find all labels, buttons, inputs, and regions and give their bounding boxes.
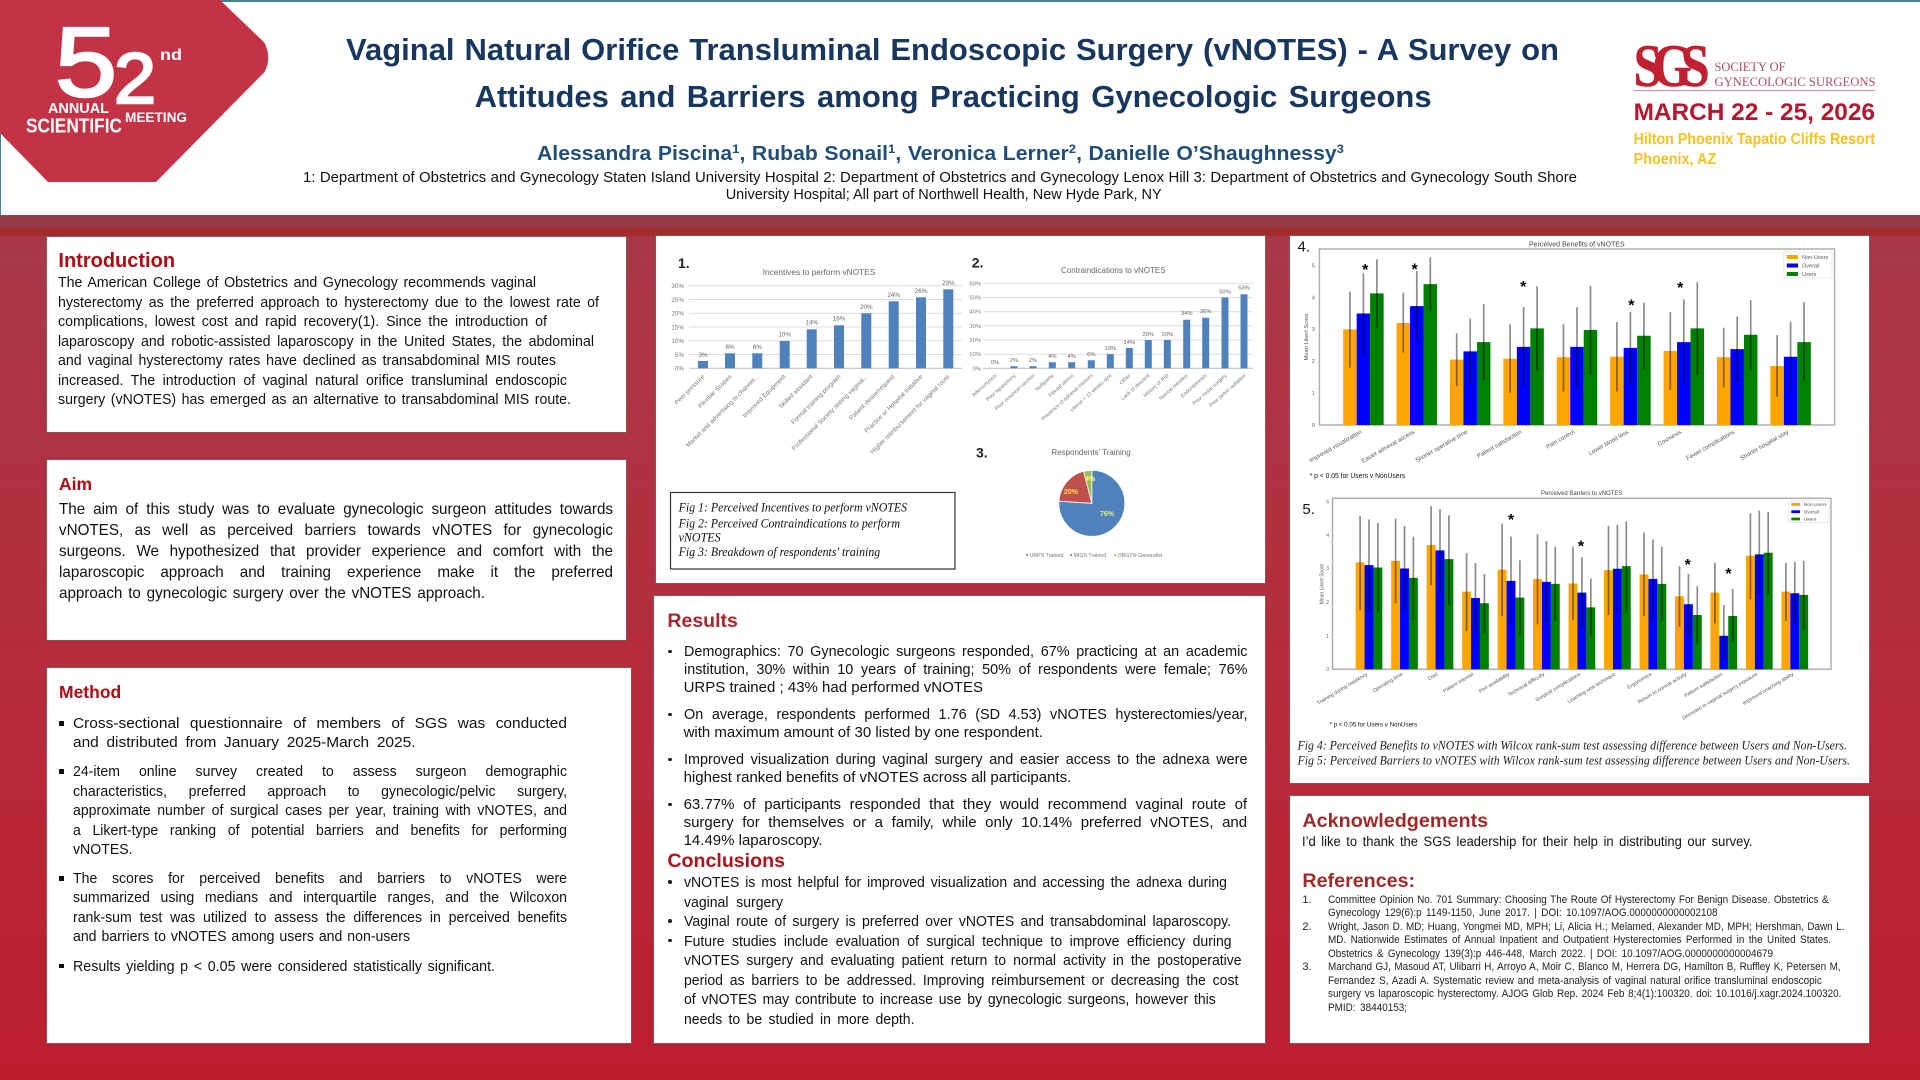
chart: perceived barriers to vNOTES: Decrease in vaginal surgery exposure <box>1681 672 1759 722</box>
chart: perceived barriers to vNOTES: 1 <box>1326 634 1329 640</box>
chart: perceived benefits of vNOTES: Mean Likert Score <box>1304 313 1310 361</box>
bullet: survey: approximate number of surgical cases per year, training with vNOTES, and <box>73 802 567 819</box>
bullet: most helpful <box>684 873 1247 912</box>
bullet: survey: 24-item online survey created to assess surgeon demographic <box>73 763 567 780</box>
bullet: questionnaire: and distributed from January 2025-March 2025. <box>73 734 416 751</box>
chart: contraindications to vNOTES: Nulliparity <box>1034 373 1056 393</box>
text: aim body: vNOTES, as well as perceived barriers towards vNOTES for gynecologic <box>59 522 613 539</box>
chart: contraindications to vNOTES: Fibroid uterus <box>1048 373 1076 399</box>
chart: contraindications to vNOTES: 60% <box>969 281 981 287</box>
text: introduction body: increased. The introduction of vaginal natural orifice transluminal endoscopic <box>58 372 567 388</box>
logo: 52nd annual scientific meeting: ANNUAL <box>48 100 109 117</box>
bullet: survey: characteristics, preferred approach to gynecologic/pelvic surgery, <box>73 783 567 800</box>
chart: incentives to perform vNOTES: 3% <box>698 352 708 359</box>
chart: contraindications to vNOTES: 2% <box>1010 358 1018 364</box>
chart: perceived barriers to vNOTES: Learning new technique <box>1567 672 1617 705</box>
chart: perceived barriers to vNOTES: 0 <box>1326 667 1329 673</box>
chart: contraindications to vNOTES: 40% <box>969 310 981 316</box>
society logo and meeting details: SGS <box>1634 33 1710 100</box>
caption box: figures 1 to 3 <box>670 492 955 569</box>
text: aim body: The aim of this study was to evaluate gynecologic surgeon attitudes towards <box>59 501 613 518</box>
chart: incentives to perform vNOTES: 24% <box>887 292 900 299</box>
caption box: figures 1 to 3: Fig 2: Perceived Contraindications to perform <box>678 517 900 531</box>
chart: contraindications to vNOTES: 0% <box>973 366 981 372</box>
chart: perceived benefits of vNOTES: Easier adnexal access <box>1361 430 1416 465</box>
society logo and meeting details: Hilton Phoenix Tapatio Cliffs Resort <box>1634 131 1875 148</box>
chart: perceived benefits of vNOTES: Shorter hospital stay <box>1740 430 1790 462</box>
text: introduction body: and vaginal hysterectomy rates have declined as transabdominal MIS routes <box>58 352 556 369</box>
chart: incentives to perform vNOTES: 0% <box>675 366 684 372</box>
chart: incentives to perform vNOTES: 29% <box>942 280 955 287</box>
chart: perceived barriers to vNOTES: * p < 0.05 for Users v NonUsers <box>1330 722 1417 729</box>
chart: perceived barriers to vNOTES: 5 <box>1326 500 1329 506</box>
chart: perceived benefits of vNOTES: Non-Users <box>1802 255 1829 261</box>
bullet: highest ranked benefits <box>684 751 1247 787</box>
reference 2 <box>1302 920 1844 960</box>
chart: perceived barriers to vNOTES: * <box>1725 566 1732 583</box>
chart: incentives to perform vNOTES: 15% <box>671 324 684 331</box>
chart: perceived benefits of vNOTES: * <box>1362 262 1369 279</box>
chart: incentives to perform vNOTES: 20% <box>860 304 873 311</box>
header <box>0 0 1920 215</box>
chart: perceived barriers to vNOTES: 5. <box>1302 501 1315 518</box>
chart: perceived benefits of vNOTES: Patient satisfaction <box>1476 430 1523 460</box>
chart: incentives to perform vNOTES: Incentives to perform vNOTES <box>763 267 876 277</box>
chart: incentives to perform vNOTES: 20% <box>671 310 684 318</box>
reference 1: Gynecology 129(6):p 1149-1150, June 2017. | DOI: 10.1097/AOG.0000000000002108 <box>1328 907 1717 919</box>
bullet: average cases <box>684 706 1247 742</box>
text: introduction body: The American College of Obstetrics and Gynecology recommends vaginal <box>58 274 536 291</box>
chart: perceived barriers to vNOTES: Operating time <box>1372 672 1404 694</box>
chart: contraindications to vNOTES: 2. <box>972 255 983 271</box>
chart: perceived barriers to vNOTES: * <box>1508 512 1515 529</box>
bullet: route preference: surgery for themselves or a family, while only 10.14% preferred vNOTES, and <box>684 814 1247 831</box>
chart: contraindications to vNOTES: 20% <box>1142 332 1154 338</box>
chart: incentives to perform vNOTES: 14% <box>805 320 818 326</box>
text: introduction body: hysterectomy as the preferred approach to hysterectomy due to the lowest rate of <box>58 294 599 310</box>
chart: respondents' training pie: Respondents' Training <box>1051 448 1131 457</box>
list: results bullets <box>668 643 1248 849</box>
chart: perceived benefits of vNOTES <box>1298 239 1835 480</box>
panel: results and conclusions <box>654 596 1265 1043</box>
panel: acknowledgements and references: 2. <box>1302 920 1312 932</box>
bullet: demographics: Demographics: 70 Gynecologic surgeons responded, 67% practicing at an academic <box>684 643 1247 660</box>
bullet: survey: a Likert-type ranking of potential barriers and benefits for performing <box>73 822 567 839</box>
bullet: most helpful: vNOTES is most helpful for improved visualization and accessing the adnexa during <box>684 874 1227 891</box>
chart: perceived benefits of vNOTES: Shorter operative time <box>1415 429 1470 464</box>
heading: results: Results <box>667 610 738 632</box>
affiliations: 1: Department of Obstetrics and Gynecology Staten Island University Hospital 2: Department of Obstetrics and Gynecology Lenox Hill 3: Department of Obstetrics and Gynecology South Shore <box>303 170 1577 186</box>
chart: incentives to perform vNOTES: Peer pressure <box>673 373 707 406</box>
chart: contraindications to vNOTES: 30% <box>969 324 981 330</box>
chart: contraindications to vNOTES: Prior laparotomy <box>985 373 1018 403</box>
text: introduction body: laparoscopy and robotic-assisted laparoscopy in the United States, the abdominal <box>58 332 594 350</box>
caption: figures 4 and 5: Fig 4: Perceived Benefits to vNOTES with Wilcox rank-sum test assessing difference between Users and Non-Users. <box>1297 738 1847 752</box>
text: introduction body: surgery (vNOTES) has emerged as an alternative to transabdominal MIS route. <box>58 391 571 408</box>
bullet: scores: summarized using medians and interquartile ranges, and the Wilcoxon <box>73 889 567 906</box>
caption box: figures 1 to 3: Fig 3: Breakdown of respondents' training <box>678 545 880 559</box>
chart: contraindications to vNOTES: 50% <box>969 296 981 302</box>
bullet: most helpful: vaginal surgery <box>684 894 783 910</box>
chart: perceived benefits of vNOTES: 0 <box>1312 423 1315 429</box>
bullet: future studies: Future studies include evaluation of surgical technique to improve efficiency during <box>684 932 1231 950</box>
chart: perceived benefits of vNOTES: 3 <box>1312 327 1315 333</box>
chart: perceived benefits of vNOTES: Improved visualization <box>1309 430 1363 464</box>
chart: perceived barriers to vNOTES: Training during residency <box>1316 671 1369 707</box>
chart: perceived barriers to vNOTES: Surgical complications <box>1535 671 1582 703</box>
panel: method <box>47 668 630 1043</box>
society logo and meeting details: Phoenix, AZ <box>1634 151 1717 168</box>
chart: incentives to perform vNOTES: 26% <box>915 288 928 295</box>
chart: incentives to perform vNOTES: Market and advertising to channel... <box>685 373 761 449</box>
text: aim body <box>59 501 613 602</box>
charts 1 to 3 and caption <box>670 255 1253 570</box>
chart: perceived benefits of vNOTES: 4. <box>1298 239 1310 256</box>
bullet: route preference: 63.77% of participants responded that they would recommend vaginal route of <box>684 796 1247 813</box>
chart: perceived benefits of vNOTES: Pain control <box>1546 430 1576 451</box>
panel: figures 4 and 5 <box>1290 236 1868 783</box>
caption: figures 4 and 5 <box>1297 738 1850 767</box>
bullet: route preference: 14.49% laparoscopy. <box>684 832 823 849</box>
chart: incentives to perform vNOTES: 10% <box>671 338 684 345</box>
chart: respondents' training pie: OBGYN Generalist <box>1118 553 1163 559</box>
bullet: future studies: needs to be studied in more depth. <box>684 1010 914 1028</box>
bullet: demographics <box>684 643 1247 697</box>
chart: contraindications to vNOTES: 20% <box>969 338 981 344</box>
logo: 52nd annual scientific meeting <box>0 0 268 182</box>
chart: perceived benefits of vNOTES: * <box>1677 280 1684 297</box>
bullet: survey <box>73 762 567 859</box>
bullet: scores <box>73 869 567 947</box>
logo: 52nd annual scientific meeting: SCIENTIFIC <box>26 116 122 138</box>
caption box: figures 1 to 3: Fig 1: Perceived Incentives to perform vNOTES <box>678 501 908 515</box>
chart: perceived barriers to vNOTES: Perceived Barriers to vNOTES <box>1541 491 1622 497</box>
heading: method: Method <box>59 682 121 702</box>
bullet: highest ranked benefits: Improved visualization during vaginal surgery and easier access to the adnexa were <box>684 751 1247 768</box>
reference 2: Wright, Jason D. MD; Huang, Yongmei MD, MPH; Li, Alicia H.; Melamed, Alexander MD, MPH; Hershman, Dawn L. <box>1328 920 1844 932</box>
chart: contraindications to vNOTES: 2% <box>1029 358 1037 364</box>
chart: perceived barriers to vNOTES: Ergonomics <box>1626 671 1653 691</box>
chart: contraindications to vNOTES: 6% <box>1087 352 1095 358</box>
chart: contraindications to vNOTES: 50% <box>1219 290 1231 296</box>
chart: perceived benefits of vNOTES: Lower blood loss <box>1588 430 1630 457</box>
chart: perceived benefits of vNOTES: * <box>1411 262 1418 278</box>
reference 3: Marchand GJ, Masoud AT, Ulibarri H, Arroyo A, Moir C, Blanco M, Herrera DG, Hamilton B, Ruffley K, Petersen M, <box>1328 961 1840 973</box>
chart: perceived barriers to vNOTES: Overall <box>1804 509 1819 515</box>
chart: perceived barriers to vNOTES: Users <box>1804 517 1817 523</box>
chart: contraindications to vNOTES: 4% <box>1048 354 1056 360</box>
chart: respondents' training pie: MIGS Trained <box>1074 553 1106 559</box>
chart: incentives to perform vNOTES: 30% <box>671 283 684 290</box>
chart: perceived benefits of vNOTES: 4 <box>1312 295 1316 301</box>
charts 4 and 5 and captions <box>1297 239 1850 767</box>
panel: acknowledgements and references: 3. <box>1302 961 1312 973</box>
chart: respondents' training pie: 20% <box>1064 489 1079 496</box>
reference 3: Fernandez S, Azadi A. Systematic review and meta-analysis of vaginal natural orifice transluminal endoscopic <box>1328 974 1821 986</box>
chart: contraindications to vNOTES: Contraindications to vNOTES <box>1061 266 1166 275</box>
text: acknowledgement body: I’d like to thank the SGS leadership for their help in distributing our survey. <box>1302 834 1753 849</box>
logo: 52nd annual scientific meeting: nd <box>160 47 182 64</box>
chart: perceived benefits of vNOTES: * p < 0.05 for Users v NonUsers <box>1310 473 1406 480</box>
reference 3 <box>1302 961 1841 1014</box>
chart: perceived barriers to vNOTES: Return to normal activity <box>1637 671 1688 706</box>
list: method bullets <box>59 715 567 975</box>
text: introduction body <box>58 274 599 408</box>
chart: incentives to perform vNOTES: Flexible Scopes <box>697 373 733 410</box>
title: Attitudes and Barriers among Practicing Gynecologic Surgeons <box>475 79 1432 114</box>
panel: aim <box>47 460 626 640</box>
reference 2: MD. Nationwide Estimates of Annual Inpatient and Outpatient Hysterectomies Performed in the United States. <box>1328 934 1831 946</box>
bullet: future studies: of vNOTES may contribute to increase use by gynecologic surgeons, however this <box>684 991 1215 1008</box>
bullet: route preference <box>684 796 1247 850</box>
chart: respondents' training pie: 76% <box>1100 511 1115 518</box>
bullet: average cases: On average, respondents performed 1.76 (SD 4.53) vNOTES hysterectomies/year, <box>684 706 1247 723</box>
reference 1: Committee Opinion No. 701 Summary: Choosing The Route Of Hysterectomy For Benign Disease. Obstetrics & <box>1328 894 1828 906</box>
chart: contraindications to vNOTES: 36% <box>1200 309 1212 315</box>
chart: incentives to perform vNOTES: 6% <box>753 344 762 351</box>
bullet: scores: and barriers to vNOTES among users and non-users <box>73 928 410 945</box>
chart: incentives to perform vNOTES: Professional Society stating vaginal... <box>791 373 870 452</box>
text: aim body: surgeons. We hypothesized that provider experience and comfort with the <box>59 543 613 560</box>
chart: respondents' training pie <box>976 445 1163 559</box>
chart: perceived barriers to vNOTES: Non-Users <box>1804 502 1827 508</box>
chart: contraindications to vNOTES: Presence of adnexal masses <box>1041 373 1095 422</box>
chart: perceived barriers to vNOTES: Technical difficulty <box>1507 671 1546 698</box>
chart: contraindications to vNOTES: 34% <box>1181 311 1193 317</box>
bullet: preferred route: Vaginal route of surgery is preferred over vNOTES and transabdominal laparoscopy. <box>684 913 1231 930</box>
list: conclusions bullets <box>668 874 1241 1028</box>
chart: perceived barriers to vNOTES: 2 <box>1326 600 1329 606</box>
chart: incentives to perform vNOTES: 6% <box>725 344 735 351</box>
society logo and meeting details: SOCIETY OF <box>1714 59 1786 74</box>
chart: incentives to perform vNOTES: 16% <box>833 316 846 322</box>
chart: contraindications to vNOTES: 20% <box>1161 332 1173 338</box>
chart: incentives to perform vNOTES: Improved Equipment <box>741 373 788 420</box>
heading: introduction: Introduction <box>58 250 175 272</box>
title: Vaginal Natural Orifice Transluminal Endoscopic Surgery (vNOTES) - A Survey on <box>346 32 1559 67</box>
caption: figures 4 and 5: Fig 5: Perceived Barriers to vNOTES with Wilcox rank-sum test assessing difference between Users and Non-Users. <box>1297 753 1850 767</box>
chart: contraindications to vNOTES: Endometriosis <box>1180 373 1209 399</box>
panel: figures 1 to 3 <box>656 236 1265 583</box>
affiliations: University Hospital; All part of Northwell Health, New Hyde Park, NY <box>726 187 1162 203</box>
chart: perceived benefits of vNOTES: * <box>1628 298 1635 314</box>
chart: perceived barriers to vNOTES: Cost <box>1427 671 1440 682</box>
authors: Alessandra Piscina1, Rubab Sonail1, Veronica Lerner2, Danielle O’Shaughnessy3 <box>537 142 1344 165</box>
reference 1 <box>1302 894 1828 919</box>
chart: perceived barriers to vNOTES: * <box>1578 538 1585 556</box>
chart: contraindications to vNOTES <box>969 255 1253 422</box>
chart: contraindications to vNOTES: 10% <box>1104 346 1116 352</box>
chart: perceived benefits of vNOTES: Perceived Benefits of vNOTES <box>1529 242 1625 248</box>
chart: contraindications to vNOTES: Prior cesarean section <box>994 373 1036 412</box>
chart: perceived barriers to vNOTES: Improved coaching ability <box>1742 671 1795 707</box>
text: aim body: laparoscopic approach and training experience make it the preferred <box>59 564 613 581</box>
chart: perceived benefits of vNOTES: 2 <box>1312 359 1315 365</box>
heading: conclusions: Conclusions <box>667 850 785 872</box>
chart: perceived barriers to vNOTES: 3 <box>1326 566 1329 572</box>
chart: perceived benefits of vNOTES: 5 <box>1312 264 1315 270</box>
chart: perceived barriers to vNOTES: Mean Likert Score <box>1320 563 1326 604</box>
chart: perceived benefits of vNOTES: 1 <box>1312 391 1315 397</box>
chart: perceived benefits of vNOTES: * <box>1520 279 1527 296</box>
chart: contraindications to vNOTES: Uterus > 12 weeks size <box>1069 373 1113 413</box>
chart: respondents' training pie: URPS Trained <box>1030 553 1063 559</box>
bullet: survey: vNOTES. <box>73 841 133 858</box>
chart: perceived barriers to vNOTES: 4 <box>1326 533 1329 539</box>
society logo and meeting details: GYNECOLOGIC SURGEONS <box>1714 74 1876 89</box>
bullet: scores: The scores for perceived benefits and barriers to vNOTES were <box>73 870 567 887</box>
bullet: future studies: vNOTES surgery and evaluating patient return to normal activity in the postoperative <box>684 952 1241 969</box>
chart: perceived benefits of vNOTES: Users <box>1802 272 1817 278</box>
chart: incentives to perform vNOTES: Skilled assistant <box>778 373 815 410</box>
chart: incentives to perform vNOTES: Patient desire/request <box>848 373 897 422</box>
chart: contraindications to vNOTES: 53% <box>1238 286 1250 292</box>
chart: respondents' training pie: 3. <box>976 445 988 461</box>
panel: introduction <box>47 237 626 432</box>
title <box>346 32 1559 114</box>
bullet: significance: Results yielding p < 0.05 were considered statistically significant. <box>73 958 495 975</box>
chart: perceived benefits of vNOTES: Cosmesis <box>1657 430 1683 448</box>
logo: 52nd annual scientific meeting: 5 <box>55 7 117 117</box>
chart: incentives to perform vNOTES: 1. <box>678 255 690 271</box>
chart: incentives to perform vNOTES: 25% <box>671 297 684 304</box>
chart: contraindications to vNOTES: 4% <box>1068 354 1076 360</box>
logo: 52nd annual scientific meeting: 2 <box>114 40 156 119</box>
affiliations <box>303 170 1577 203</box>
chart: perceived barriers to vNOTES: Port availability <box>1478 671 1511 695</box>
bullet: demographics: institution, 30% within 10 years of training; 50% of respondents were female; 76% <box>684 661 1247 678</box>
text: aim body: approach to gynecologic surgery over the vNOTES approach. <box>59 585 485 602</box>
chart: contraindications to vNOTES: 14% <box>1123 340 1135 346</box>
chart: contraindications to vNOTES: Narrow introitus <box>1158 373 1190 402</box>
chart: perceived barriers to vNOTES: * <box>1685 557 1692 574</box>
bullet: average cases: with maximum amount of 30 listed by one respondent. <box>684 724 1043 741</box>
chart: incentives to perform vNOTES <box>671 255 962 456</box>
society logo and meeting details <box>1634 33 1876 168</box>
chart: contraindications to vNOTES: Adenomyosis <box>971 373 999 398</box>
caption box: figures 1 to 3: vNOTES <box>679 531 721 545</box>
chart: contraindications to vNOTES: Lack of descent <box>1120 373 1152 402</box>
bullet: future studies: period as barriers to be addressed. Improving reimbursement or decreasing the cost <box>684 972 1238 988</box>
header band <box>0 215 1920 236</box>
bullet: future studies <box>684 932 1247 1029</box>
chart: incentives to perform vNOTES: Formal training program <box>790 373 842 426</box>
bullet: scores: rank-sum test was utilized to assess the differences in perceived benefits <box>73 909 567 926</box>
heading: acknowledgements: Acknowledgements <box>1302 810 1488 832</box>
bullet: questionnaire <box>73 714 567 753</box>
chart: contraindications to vNOTES: Prior pelvic radiation <box>1208 373 1247 409</box>
panel: acknowledgements and references <box>1290 796 1868 1043</box>
bullet: demographics: URPS trained ; 43% had performed vNOTES <box>684 679 983 696</box>
chart: contraindications to vNOTES: Prior rectal surgery <box>1192 373 1229 407</box>
chart: perceived barriers to vNOTES <box>1302 491 1831 729</box>
chart: perceived benefits of vNOTES: Overall <box>1802 264 1819 270</box>
bullet: questionnaire: Cross-sectional questionnaire of members of SGS was conducted <box>73 715 567 732</box>
text: introduction body: complications, lowest cost and rapid recovery(1). Since the introduction of <box>58 313 547 330</box>
chart: perceived benefits of vNOTES: Fewer complications <box>1686 430 1736 462</box>
panel: acknowledgements and references: 1. <box>1302 894 1312 906</box>
chart: respondents' training pie: 4% <box>1085 476 1096 483</box>
chart: contraindications to vNOTES: 10% <box>969 352 981 358</box>
chart: contraindications to vNOTES: History of PID <box>1143 373 1171 399</box>
heading: aim: Aim <box>59 474 92 494</box>
reference 2: Obstetrics & Gynecology 139(3):p 446-448, March 2022. | DOI: 10.1097/AOG.0000000000004679 <box>1328 948 1773 960</box>
list: references <box>1302 894 1844 1014</box>
society logo and meeting details: MARCH 22 - 25, 2026 <box>1634 99 1875 126</box>
reference 3: surgery vs laparoscopic hysterectomy. AJOG Glob Rep. 2024 Feb 8;4(1):100320. doi: 10.1016/j.xagr.2024.100320. <box>1328 988 1841 1000</box>
reference 3: PMID: 38440153; <box>1328 1002 1407 1014</box>
bullet: highest ranked benefits: highest ranked benefits of vNOTES across all participants. <box>684 769 1071 786</box>
heading: references: References: <box>1302 870 1415 892</box>
chart: incentives to perform vNOTES: 5% <box>675 352 684 359</box>
chart: incentives to perform vNOTES: Higher reimbursement for vaginal route <box>869 373 952 456</box>
chart: perceived barriers to vNOTES: Patient interest <box>1442 671 1476 695</box>
chart: incentives to perform vNOTES: Practice or Hospital Initiative <box>863 373 925 435</box>
chart: perceived barriers to vNOTES: Patient satisfaction <box>1684 672 1724 699</box>
logo: 52nd annual scientific meeting: MEETING <box>125 109 187 125</box>
chart: incentives to perform vNOTES: 10% <box>778 332 791 338</box>
chart: contraindications to vNOTES: 0% <box>991 360 999 366</box>
chart: contraindications to vNOTES: Other <box>1119 373 1133 386</box>
